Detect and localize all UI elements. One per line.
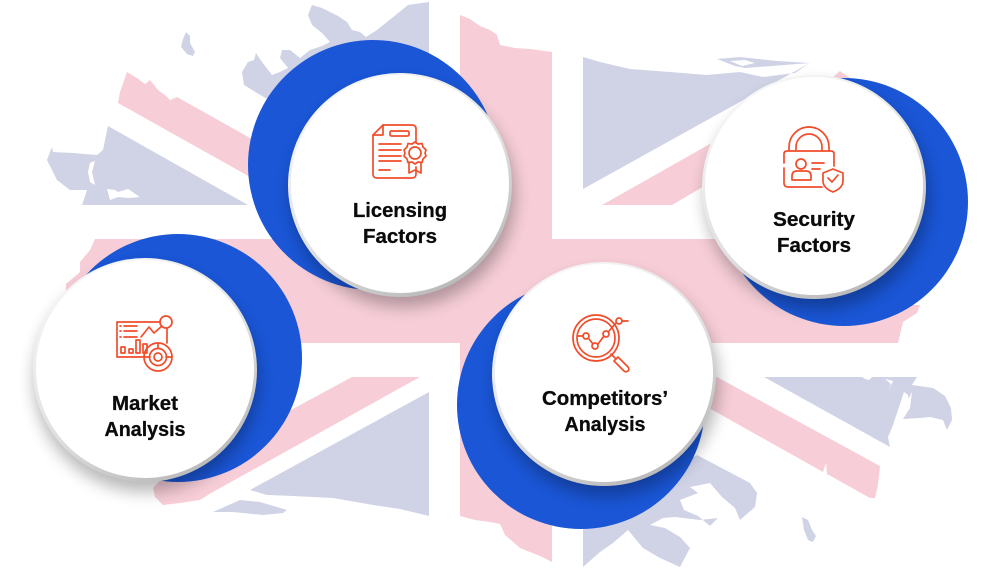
blue island top left [181, 32, 195, 56]
competitors circle shadow [495, 272, 719, 496]
blue top right [583, 57, 810, 189]
red diagonal top left [118, 72, 350, 205]
licensing circle shadow [291, 83, 515, 307]
security circle shadow [705, 85, 929, 309]
blue bottom centre [583, 455, 757, 567]
red diagonal bottom right [700, 377, 880, 498]
competitors circle [492, 262, 716, 486]
security circle [702, 75, 926, 299]
competitors blue crescent [457, 281, 705, 529]
panel: licensing factors [248, 40, 515, 307]
competitors label: Analysis [564, 414, 646, 436]
blue bottom left [250, 392, 429, 516]
panel: market analysis [33, 234, 302, 492]
red diagonal bottom left [153, 377, 420, 505]
blue bottom right [764, 377, 952, 447]
blue island bottom left [213, 500, 287, 515]
red diagonal top right [602, 71, 850, 205]
market circle shadow [34, 268, 258, 492]
icon: certificate document [373, 125, 426, 178]
blue island bottom right [802, 517, 816, 542]
blue top left lower [47, 126, 248, 205]
panel: competitors analysis [457, 262, 719, 529]
icon: market dashboard [117, 316, 172, 371]
icon: padlock with id and shield [784, 127, 843, 192]
market circle [33, 258, 257, 482]
security label: Factors [777, 235, 851, 257]
icon: magnifier with trend line [573, 315, 629, 372]
panel: security factors [702, 75, 968, 326]
market blue crescent [54, 234, 302, 482]
security label: Security [773, 209, 856, 231]
market label: Analysis [104, 419, 186, 441]
blue top left upper [242, 2, 429, 190]
licensing label: Factors [363, 226, 437, 248]
competitors label: Competitors’ [542, 388, 668, 410]
coast details [88, 60, 912, 508]
market label: Market [112, 393, 178, 415]
licensing label: Licensing [353, 200, 447, 222]
security blue crescent [720, 78, 968, 326]
licensing circle [288, 73, 512, 297]
licensing blue crescent [248, 40, 498, 290]
